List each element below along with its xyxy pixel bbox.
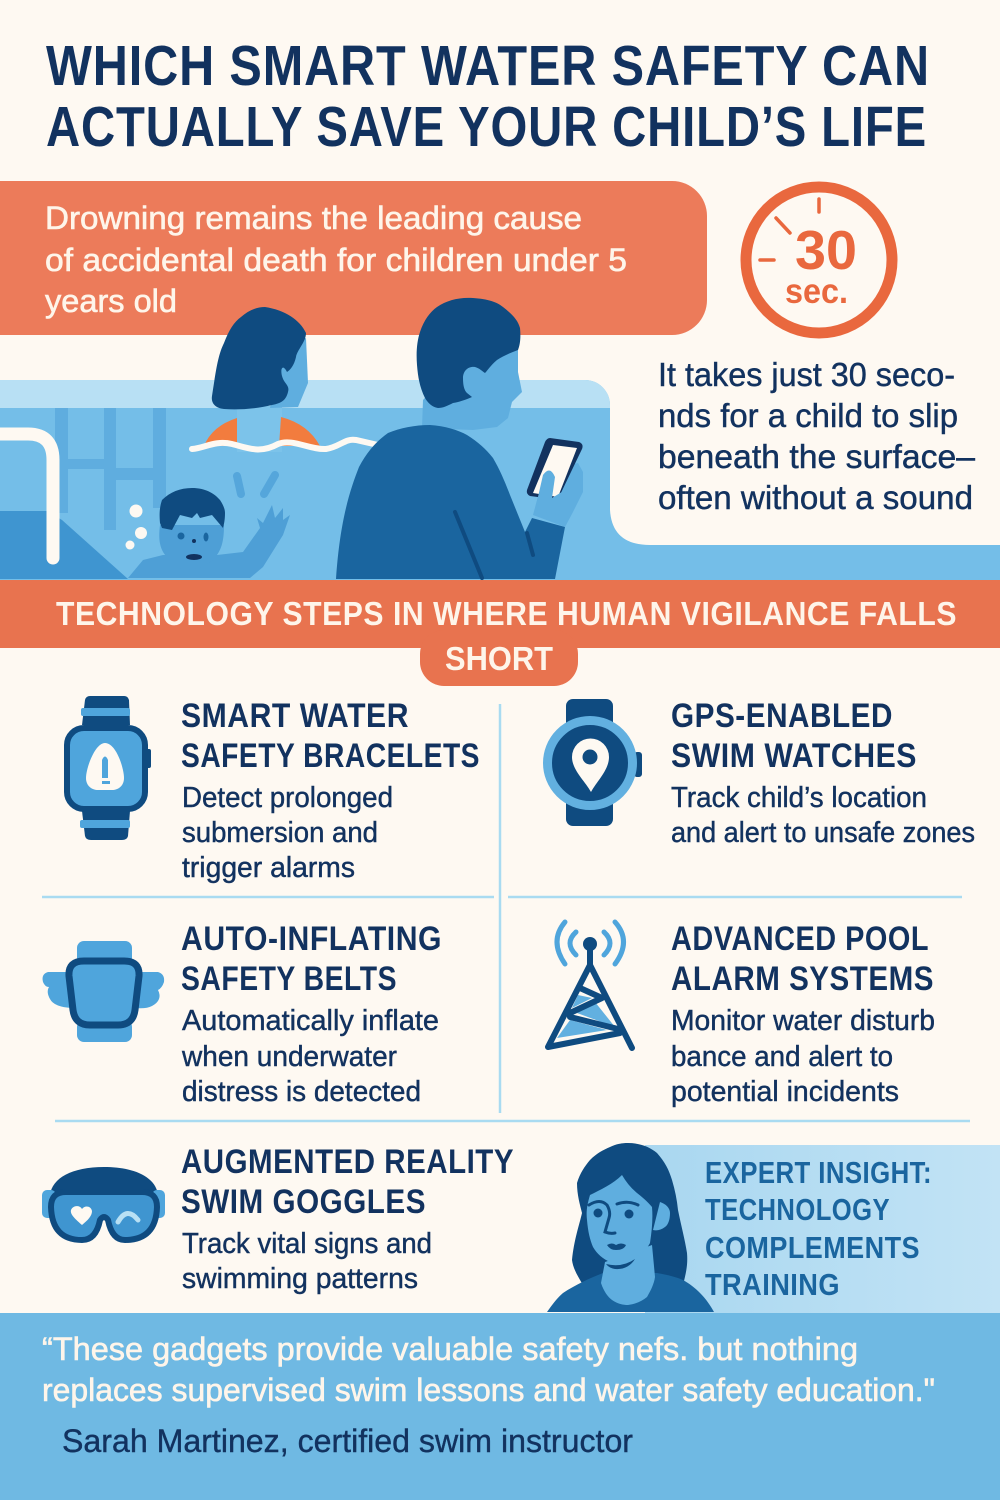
text: swim goggles: AUGMENTED REALITY xyxy=(181,1143,514,1181)
icon: pool alarm tower xyxy=(548,922,632,1048)
text: smart bracelets: Detect prolonged xyxy=(182,782,393,814)
text: GPS watches: GPS-ENABLED xyxy=(671,697,893,735)
title xyxy=(46,34,930,159)
text: pool alarms: potential incidents xyxy=(671,1076,899,1108)
text: thirty seconds fact: often without a sound xyxy=(658,479,973,516)
text: smart bracelets: trigger alarms xyxy=(182,852,355,884)
pool floor xyxy=(0,511,128,579)
text: pool alarms xyxy=(671,920,935,1108)
banner: drowning statistic: of accidental death for children under 5 xyxy=(45,242,627,278)
icon: 30 second timer: 30 xyxy=(795,219,857,281)
banner: technology heading xyxy=(0,580,1000,686)
splashes xyxy=(237,475,275,494)
text: safety belts: Automatically inflate xyxy=(182,1005,439,1037)
text: thirty seconds fact: nds for a child to slip xyxy=(658,397,958,434)
panel: expert insight: COMPLEMENTS xyxy=(705,1230,920,1265)
icon: smart bracelet xyxy=(67,696,151,840)
text: GPS watches xyxy=(671,697,975,849)
bubbles xyxy=(126,504,147,550)
text: thirty seconds fact: It takes just 30 seco- xyxy=(658,356,955,393)
icon: 30 second timer: sec. xyxy=(785,272,848,311)
illustration: expert portrait xyxy=(547,1143,714,1312)
text: safety belts xyxy=(181,920,442,1108)
text: pool alarms: bance and alert to xyxy=(671,1041,893,1073)
text: swim goggles: swimming patterns xyxy=(182,1263,418,1295)
text: swim goggles: Track vital signs and xyxy=(182,1228,432,1260)
pool rail xyxy=(0,434,53,558)
woman in pool xyxy=(204,307,320,452)
text: smart bracelets xyxy=(181,697,480,884)
panel: quote: “These gadgets provide valuable safety nefs. but nothing xyxy=(42,1331,858,1367)
text: smart bracelets: SMART WATER xyxy=(181,697,409,735)
pool ladder background xyxy=(55,408,166,530)
banner: drowning statistic: years old xyxy=(45,283,177,319)
text: pool alarms: Monitor water disturb xyxy=(671,1005,935,1037)
text: thirty seconds fact: beneath the surface– xyxy=(658,438,976,475)
panel: quote xyxy=(0,1313,1000,1500)
panel: expert insight: TECHNOLOGY xyxy=(705,1192,890,1227)
banner: drowning statistic: Drowning remains the leading cause xyxy=(45,200,582,236)
icon: 30 second timer xyxy=(746,187,892,333)
pool water xyxy=(0,380,1000,580)
text: safety belts: when underwater xyxy=(181,1041,397,1073)
icon: GPS swim watch xyxy=(548,699,642,826)
text: pool alarms: ADVANCED POOL xyxy=(671,920,929,958)
man with phone xyxy=(336,298,583,579)
banner: drowning statistic xyxy=(0,181,707,335)
text: thirty seconds fact xyxy=(658,356,976,516)
panel: expert insight xyxy=(645,1145,1000,1313)
illustration: pool scene xyxy=(0,298,1000,580)
icon: AR goggles xyxy=(42,1167,165,1240)
panel: quote: replaces supervised swim lessons and water safety education." xyxy=(42,1372,935,1408)
text: safety belts: distress is detected xyxy=(182,1076,421,1108)
text: swim goggles: SWIM GOGGLES xyxy=(181,1183,426,1221)
text: smart bracelets: submersion and xyxy=(182,817,378,849)
water surface line xyxy=(192,440,378,449)
text: safety belts: AUTO-INFLATING xyxy=(181,920,442,958)
text: safety belts: SAFETY BELTS xyxy=(181,960,397,998)
icon: auto-inflating belt xyxy=(43,941,164,1042)
drowning child xyxy=(128,488,290,578)
text: swim goggles xyxy=(181,1143,514,1295)
text: pool alarms: ALARM SYSTEMS xyxy=(671,960,934,998)
panel: quote: Sarah Martinez, certified swim instructor xyxy=(62,1423,633,1459)
banner: technology heading: SHORT xyxy=(445,640,553,677)
text: smart bracelets: SAFETY BRACELETS xyxy=(181,737,480,775)
text: GPS watches: and alert to unsafe zones xyxy=(671,817,975,849)
panel: expert insight: EXPERT INSIGHT: xyxy=(705,1155,932,1190)
text: GPS watches: Track child’s location xyxy=(671,782,927,814)
text: GPS watches: SWIM WATCHES xyxy=(671,737,917,775)
panel: expert insight: TRAINING xyxy=(705,1267,840,1302)
